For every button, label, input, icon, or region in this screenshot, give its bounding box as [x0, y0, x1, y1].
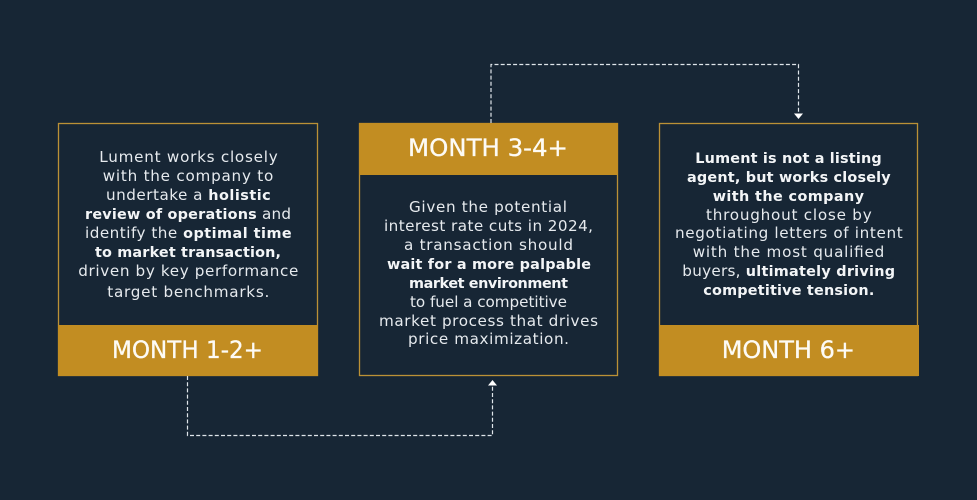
- text block: month 6 description: buyers, ultimately driving: [682, 262, 895, 280]
- text block: month 6 description: with the most qualified: [693, 243, 884, 261]
- text block: month 1-2 description: with the company to: [103, 167, 273, 185]
- text block: month 3-4 description: [379, 198, 598, 348]
- header: month 3-4: [359, 123, 618, 175]
- text block: month 3-4 description: wait for a more palpable: [387, 257, 591, 273]
- text block: month 3-4 description: market process that drives: [379, 312, 598, 330]
- text block: month 1-2 description: identify the optimal time: [85, 224, 292, 242]
- text block: month 1-2 description: undertake a holistic: [106, 186, 271, 204]
- text block: month 3-4 description: price maximization.: [408, 330, 569, 348]
- arrow: month 3-4 to month 6: [491, 64, 803, 123]
- text block: month 3-4 description: interest rate cuts in 2024,: [384, 217, 593, 235]
- arrow: month 1-2 to month 3-4: [188, 376, 497, 436]
- text block: month 1-2 description: to market transaction,: [95, 245, 281, 261]
- text block: month 3-4 description: a transaction should: [404, 236, 573, 254]
- header: month 1-2: [58, 325, 318, 376]
- panel: month 6: [659, 124, 919, 376]
- text block: month 3-4 description: Given the potential: [409, 198, 567, 216]
- text block: month 3-4 description: market environment: [409, 276, 568, 292]
- header: month 6: [659, 325, 919, 376]
- text block: month 1-2 description: Lument works closely: [99, 148, 278, 166]
- text block: month 1-2 description: review of operations and: [85, 205, 291, 223]
- header: month 6: MONTH 6+: [722, 336, 855, 364]
- panel: month 1-2: [58, 124, 318, 376]
- text block: month 6 description: Lument is not a listing: [695, 151, 882, 167]
- text block: month 1-2 description: target benchmarks.: [107, 283, 269, 301]
- text block: month 6 description: throughout close by: [706, 206, 872, 224]
- panel: month 3-4: [359, 123, 618, 376]
- text block: month 6 description: [675, 151, 903, 299]
- header: month 1-2: MONTH 1-2+: [112, 336, 263, 364]
- text block: month 3-4 description: to fuel a competitive: [410, 293, 567, 311]
- text block: month 6 description: with the company: [713, 189, 865, 205]
- text block: month 1-2 description: [78, 148, 298, 301]
- text block: month 6 description: negotiating letters of intent: [675, 224, 903, 242]
- text block: month 1-2 description: driven by key performance: [78, 262, 298, 280]
- text block: month 6 description: agent, but works closely: [687, 170, 891, 186]
- text block: month 6 description: competitive tension.: [703, 283, 874, 299]
- header: month 3-4: MONTH 3-4+: [408, 134, 568, 162]
